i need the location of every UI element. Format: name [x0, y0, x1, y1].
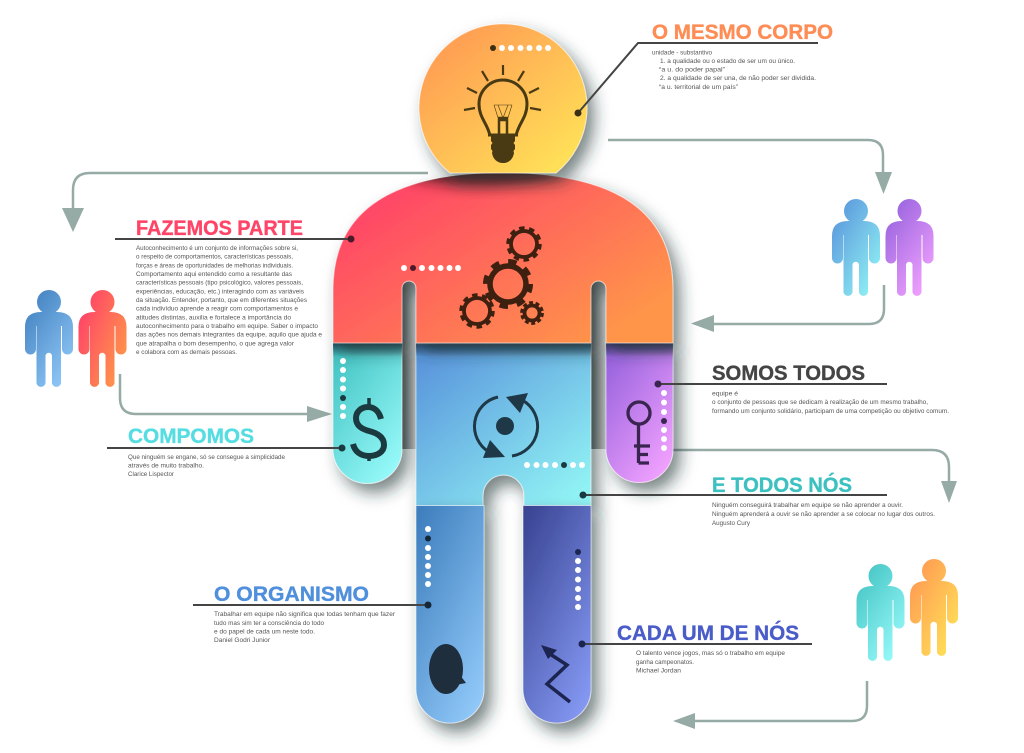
dots: right arm [661, 390, 667, 451]
body text: atitudes distintas, auxilia e fortalece a importância do [136, 314, 292, 321]
leader line [107, 444, 346, 452]
arrow: right arm to lower figures [606, 450, 957, 503]
arrow: figures back to torso [691, 285, 884, 332]
heading: CADA UM DE NÓS [617, 620, 799, 645]
icon: key [628, 402, 650, 463]
icon: speech bubble [429, 644, 466, 694]
quote text: Augusto Cury [712, 520, 751, 527]
dots: left arm [340, 358, 346, 419]
quote text: Clarice Lispector [128, 471, 174, 478]
heading: O MESMO CORPO [652, 20, 833, 44]
definition text: o conjunto de pessoas que se dedicam à realização de um mesmo trabalho, [712, 399, 928, 406]
arrow: head to left figures [62, 173, 428, 232]
definition text: 2. a qualidade de ser una, de não poder ser dividida. [660, 75, 816, 82]
quote text: O talento vence jogos, mas só o trabalho em equipe [636, 650, 785, 657]
quote text: Trabalhar em equipe não significa que todas tenham que fazer [214, 611, 395, 618]
quote text [712, 502, 935, 527]
leader line [580, 492, 887, 498]
leader line [654, 380, 887, 388]
definition text: unidade - substantivo [652, 50, 712, 56]
leader line [574, 43, 818, 116]
arrow: left figures to left arm [120, 374, 332, 422]
quote text: Michael Jordan [636, 668, 682, 674]
quote text: Daniel Godri Junior [214, 637, 270, 644]
definition text [652, 50, 816, 91]
dots: shoulders [401, 265, 461, 271]
definition text: 1. a qualidade ou o estado de ser um ou único. [660, 58, 795, 65]
definition text [712, 390, 949, 415]
icon: people pair bottom right [856, 559, 958, 661]
body text: das ações nos demais integrantes da equipe, aquilo que ajuda e [136, 332, 323, 339]
definition text: “a u. do poder papal” [659, 66, 725, 74]
body text: que atrapalha o bom desempenho, o que agrega valor [136, 340, 294, 347]
quote text [128, 454, 285, 478]
quote text: tudo mas sim ter a consciência do todo [214, 620, 325, 627]
panel: O organismo [193, 582, 432, 644]
quote text: Que ninguém se engane, só se consegue a simplicidade [128, 454, 285, 461]
heading: E TODOS NÓS [712, 472, 852, 497]
body part: left arm [333, 343, 402, 484]
panel: Cada um de nós [578, 620, 812, 674]
dots: left leg [425, 526, 431, 587]
panel: E todos nós [580, 472, 935, 527]
panel: Compomos [107, 424, 346, 478]
dots: right leg [575, 549, 581, 610]
leader line [115, 236, 354, 242]
dots: head [490, 45, 551, 51]
body part: center torso [416, 344, 591, 506]
icon: gears [461, 228, 542, 327]
quote text [214, 611, 395, 644]
body text: Autoconhecimento é um conjunto de informações sobre si, [136, 245, 298, 252]
quote text: e do papel de cada um neste todo. [214, 628, 315, 636]
body part: right leg [523, 506, 591, 723]
quote text: Ninguém conseguirá trabalhar em equipe se não aprender a ouvir. [712, 502, 903, 509]
icon: zigzag arrow [541, 645, 570, 702]
leader line [578, 640, 812, 648]
heading: SOMOS TODOS [712, 361, 865, 385]
body text: forças e áreas de oportunidades de melhorias individuais. [136, 262, 293, 269]
body text: Comportamento aqui entendido como a resultante das [136, 271, 292, 278]
panel: Fazemos parte [115, 216, 354, 356]
icon: dollar sign [353, 398, 384, 461]
arrow: top right to figures [608, 140, 892, 194]
body text: características pessoais (tipo psicológico, valores pessoais, [136, 280, 303, 287]
icon: light bulb [464, 65, 541, 163]
leader line [193, 602, 432, 608]
body part: head [419, 24, 587, 173]
shadow bands under shoulders [333, 343, 673, 357]
head shadow on shoulders [408, 173, 564, 196]
body text: e colabora com as demais pessoas. [136, 349, 237, 356]
icon: cycle arrows [474, 393, 538, 458]
panel: Somos todos [654, 361, 949, 415]
definition text: equipe é [712, 390, 739, 398]
icon: people pair left [25, 290, 126, 387]
definition text: “a u. territorial de um país” [659, 84, 738, 91]
dots: center [524, 462, 585, 468]
body text: da situação. Entender, portanto, que em diferentes situações [136, 297, 307, 304]
definition text: formando um conjunto solidário, participam de uma competição ou objetivo comum. [712, 408, 949, 415]
arrow: lower figures to right leg [673, 681, 867, 729]
quote text [636, 650, 785, 674]
heading: FAZEMOS PARTE [136, 216, 303, 240]
body part: shoulders [333, 173, 673, 343]
human body figure [333, 24, 673, 723]
quote text: ganha campeonatos. [636, 659, 694, 666]
icon: people pair top right [832, 199, 934, 296]
body part: left leg [416, 506, 484, 723]
heading: O ORGANISMO [214, 582, 369, 606]
quote text: Ninguém aprenderá a ouvir se não aprender a se colocar no lugar dos outros. [712, 511, 935, 518]
body part: right arm [606, 343, 673, 482]
body text: autoconhecimento para o trabalho em equipe. Saber o impacto [136, 323, 319, 330]
body text [136, 245, 323, 356]
body text: experiências, educação, etc.) interagindo com as variáveis [136, 288, 304, 295]
quote text: através de muito trabalho. [128, 462, 204, 470]
heading: COMPOMOS [128, 424, 254, 448]
panel: O mesmo corpo [574, 20, 833, 116]
body text: cada indivíduo aprende a reagir com comportamentos e [136, 306, 299, 313]
body text: o respeito de comportamentos, características pessoais, [136, 254, 293, 261]
